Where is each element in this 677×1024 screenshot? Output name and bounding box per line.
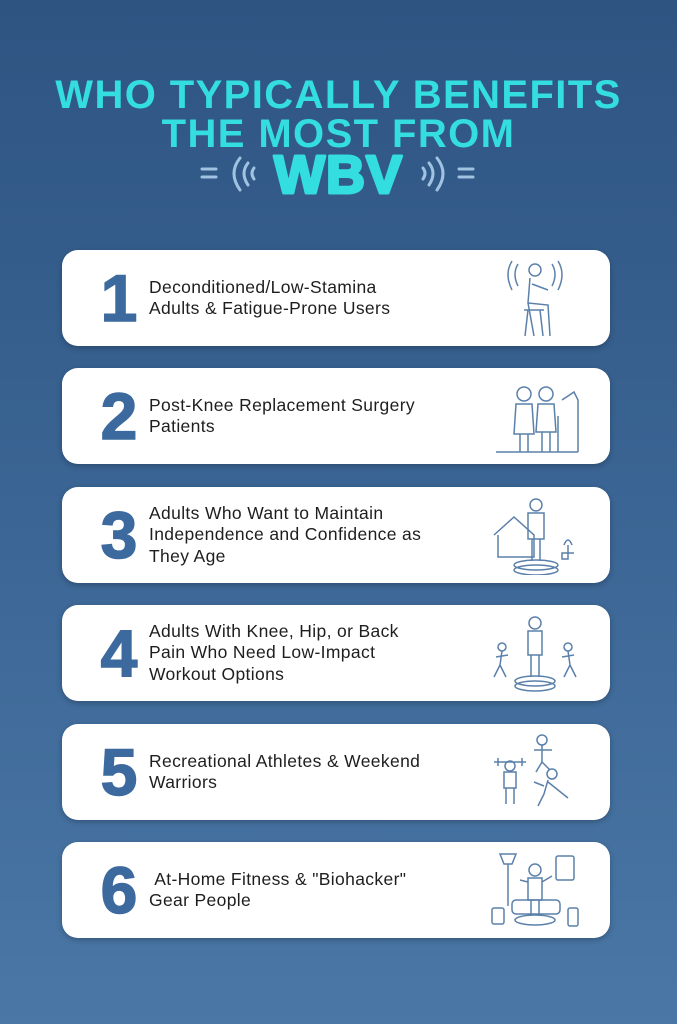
text 5 (149, 750, 420, 792)
icon: elderly couple (496, 386, 579, 453)
card 5 (62, 724, 610, 820)
number 1: 1 (101, 261, 137, 335)
text 4 (149, 621, 399, 684)
text 6: At-Home Fitness & "Biohacker" (154, 868, 406, 888)
number 2: 2 (101, 379, 137, 453)
title: WBV with vibration marks (200, 152, 474, 198)
text 1: Deconditioned/Low-Stamina (149, 276, 377, 296)
text 5: Warriors (149, 772, 217, 792)
card 3 (62, 487, 610, 583)
icon: person on platform (494, 498, 574, 575)
text 3: Adults Who Want to Maintain (149, 503, 383, 523)
title: THE MOST FROM (162, 112, 515, 156)
number 5: 5 (101, 735, 137, 809)
icon: seated person vibrating (507, 260, 563, 336)
text 6 (149, 868, 406, 910)
title (55, 73, 622, 156)
card 1 (62, 250, 610, 346)
icon: home gadgets (491, 853, 579, 927)
text 3: They Age (149, 546, 226, 566)
text 4: Adults With Knee, Hip, or Back (149, 621, 399, 641)
card 6 (62, 842, 610, 938)
text 2: Post-Knee Replacement Surgery (149, 394, 415, 414)
text 2 (149, 394, 415, 436)
text 3: Independence and Confidence as (149, 524, 421, 544)
number 6: 6 (101, 853, 137, 927)
number 4: 4 (101, 616, 137, 690)
text 1: Adults & Fatigue-Prone Users (149, 298, 390, 318)
text 4: Pain Who Need Low-Impact (149, 642, 375, 662)
text 2: Patients (149, 416, 215, 436)
text 4: Workout Options (149, 664, 284, 684)
number 3: 3 (101, 498, 137, 572)
title: WHO TYPICALLY BENEFITS (55, 73, 622, 117)
icon: athletes (494, 734, 568, 806)
text 3 (149, 503, 421, 566)
card 4 (62, 605, 610, 701)
text 5: Recreational Athletes & Weekend (149, 750, 420, 770)
text 1 (149, 276, 390, 318)
card 2 (62, 368, 610, 464)
icon: runners and platform (493, 616, 577, 692)
text 6: Gear People (149, 890, 251, 910)
